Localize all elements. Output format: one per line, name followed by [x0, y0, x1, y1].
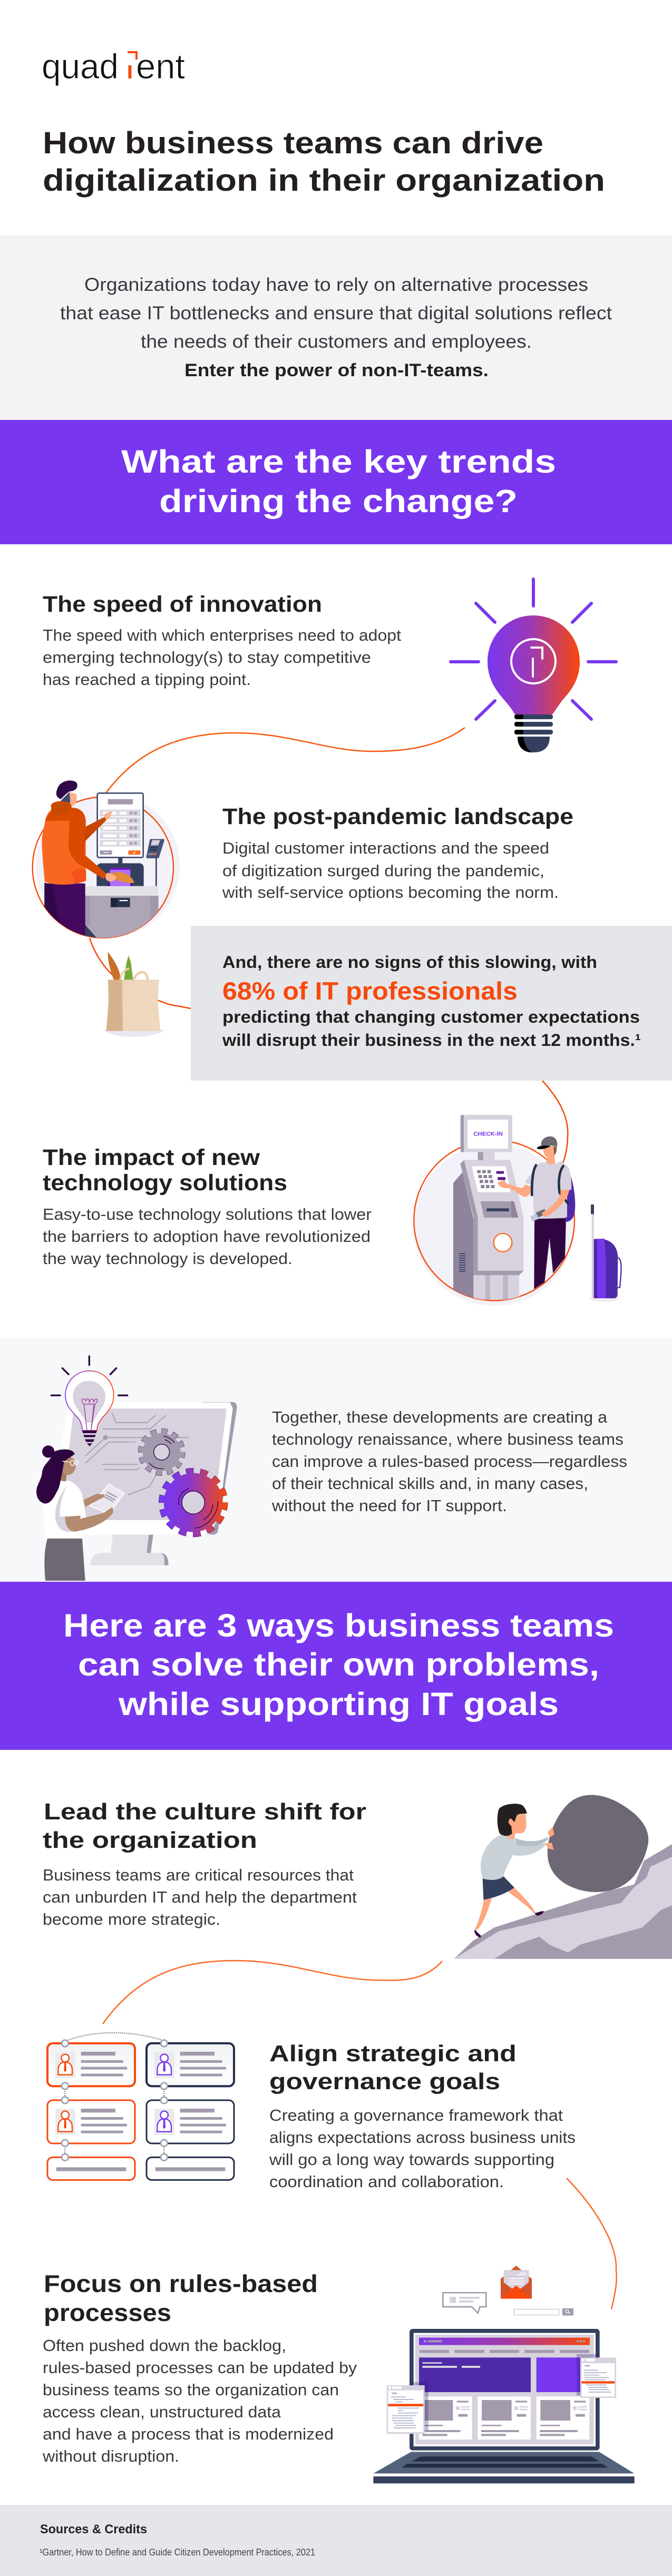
- illustration: governance org chart: [47, 2033, 234, 2180]
- illustration: laptop with app screens: [373, 2266, 635, 2483]
- title: How business teams can drive: [43, 126, 543, 160]
- text: focus on rules-based processes: rules-based processes can be updated by: [43, 2358, 357, 2377]
- panel: technology renaissance: of their technical skills and, in many cases,: [272, 1474, 588, 1493]
- text: align strategic and governance goals: coordination and collaboration.: [269, 2172, 504, 2191]
- text: lead the culture shift: Lead the culture shift for: [44, 1799, 366, 1825]
- text: focus on rules-based processes: Often pushed down the backlog,: [43, 2336, 286, 2355]
- banner: 3 ways: [0, 1582, 672, 1750]
- illustration: self-service kiosk: [33, 780, 180, 939]
- footer: sources and credits: [0, 2505, 672, 2576]
- title: [43, 126, 605, 198]
- text: focus on rules-based processes: business teams so the organization can: [43, 2381, 339, 2399]
- text: post-pandemic landscape: The post-pandemic landscape: [222, 804, 573, 829]
- panel: intro: [0, 236, 672, 420]
- text: align strategic and governance goals: Creating a governance framework that: [269, 2106, 563, 2124]
- text: impact of new technology: Easy-to-use technology solutions that lower: [43, 1205, 372, 1223]
- icon: lightbulb: [451, 579, 616, 752]
- panel: technology renaissance: technology renaissance, where business teams: [272, 1430, 624, 1448]
- footer: sources and credits: ¹Gartner, How to Define and Guide Citizen Development Practices, 2021: [40, 2547, 315, 2558]
- logo: quadient: ent: [136, 47, 185, 86]
- footer: sources and credits: Sources & Credits: [40, 2522, 147, 2536]
- text: impact of new technology: the barriers to adoption have revolutionized: [43, 1227, 371, 1246]
- text: post-pandemic landscape: of digitization surged during the pandemic,: [222, 861, 544, 880]
- text: speed of innovation: [43, 592, 401, 689]
- text: align strategic and governance goals: [269, 2041, 576, 2191]
- callout: 68% of IT professionals: predicting that changing customer expectations: [222, 1007, 640, 1026]
- text: align strategic and governance goals: Align strategic and: [269, 2041, 517, 2066]
- banner: 3 ways: while supporting IT goals: [118, 1686, 559, 1722]
- arrow: curve from hill to org chart: [103, 1961, 442, 2024]
- text: impact of new technology: the way technology is developed.: [43, 1249, 293, 1268]
- title: digitalization in their organization: [43, 163, 605, 198]
- arrow: curve from callout to check-in: [542, 1081, 568, 1164]
- text: speed of innovation: has reached a tipping point.: [43, 670, 251, 689]
- panel: technology renaissance: Together, these developments are creating a: [272, 1408, 608, 1426]
- text: focus on rules-based processes: Focus on rules-based: [44, 2270, 318, 2297]
- logo: quadient: [42, 47, 185, 86]
- banner: key trends: driving the change?: [159, 483, 518, 519]
- text: focus on rules-based processes: [42, 2270, 357, 2465]
- text: lead the culture shift: Business teams are critical resources that: [43, 1866, 354, 1884]
- text: post-pandemic landscape: [222, 804, 573, 902]
- text: speed of innovation: The speed of innovation: [43, 592, 322, 617]
- banner: key trends: [0, 420, 672, 544]
- illustration: grocery bag: [103, 952, 164, 1037]
- text: impact of new technology: The impact of new: [43, 1145, 260, 1170]
- illustration: person pushing boulder uphill: [454, 1795, 672, 1959]
- panel: technology renaissance: [0, 1338, 672, 1582]
- text: post-pandemic landscape: Digital customer interactions and the speed: [222, 839, 549, 857]
- banner: 3 ways: can solve their own problems,: [78, 1647, 599, 1682]
- text: lead the culture shift: become more strategic.: [43, 1910, 220, 1928]
- text: lead the culture shift: can unburden IT and help the department: [43, 1888, 357, 1906]
- arrow: curve from kiosk to bag and callout: [90, 938, 191, 1008]
- callout: 68% of IT professionals: [191, 926, 672, 1081]
- text: align strategic and governance goals: will go a long way towards supporting: [269, 2150, 554, 2169]
- text: impact of new technology: [43, 1145, 372, 1268]
- text: align strategic and governance goals: aligns expectations across business units: [269, 2128, 576, 2147]
- text: impact of new technology: technology solutions: [43, 1170, 287, 1196]
- panel: intro: the needs of their customers and employees.: [141, 331, 532, 352]
- panel: technology renaissance: without the need for IT support.: [271, 1496, 507, 1515]
- text: focus on rules-based processes: access clean, unstructured data: [43, 2403, 281, 2421]
- banner: key trends: What are the key trends: [121, 444, 556, 479]
- illustration: check-in kiosk with traveller: [413, 1115, 621, 1306]
- logo: quadient: quad: [42, 47, 119, 86]
- arrow: curve from bulb to kiosk: [106, 728, 465, 793]
- text: focus on rules-based processes: processes: [44, 2299, 171, 2326]
- callout: 68% of IT professionals: 68% of IT professionals: [222, 977, 518, 1005]
- text: focus on rules-based processes: and have a process that is modernized: [43, 2425, 334, 2443]
- text: align strategic and governance goals: governance goals: [269, 2069, 500, 2094]
- panel: intro: that ease IT bottlenecks and ensure that digital solutions reflect: [60, 303, 612, 324]
- illustration: gears, bulb and woman with tablet: [36, 1356, 237, 1581]
- logo: quadient: i: [126, 47, 134, 86]
- text: lead the culture shift: [43, 1799, 366, 1928]
- arrow: curve from org chart to laptop: [567, 2178, 617, 2309]
- text: speed of innovation: The speed with which enterprises need to adopt: [43, 626, 401, 644]
- callout: 68% of IT professionals: And, there are no signs of this slowing, with: [222, 953, 597, 972]
- panel: technology renaissance: can improve a rules-based process—regardless: [272, 1452, 627, 1471]
- callout: 68% of IT professionals: will disrupt their business in the next 12 months.¹: [222, 1031, 641, 1050]
- panel: intro: Organizations today have to rely on alternative processes: [84, 275, 588, 295]
- panel: intro: Enter the power of non-IT-teams.: [184, 360, 489, 380]
- text: lead the culture shift: the organization: [43, 1827, 257, 1853]
- text: speed of innovation: emerging technology(s) to stay competitive: [43, 648, 371, 667]
- illustration: check-in kiosk with traveller: CHECK-IN: [473, 1131, 503, 1137]
- banner: 3 ways: Here are 3 ways business teams: [63, 1608, 614, 1643]
- text: post-pandemic landscape: with self-service options becoming the norm.: [222, 883, 559, 902]
- text: focus on rules-based processes: without disruption.: [42, 2447, 179, 2465]
